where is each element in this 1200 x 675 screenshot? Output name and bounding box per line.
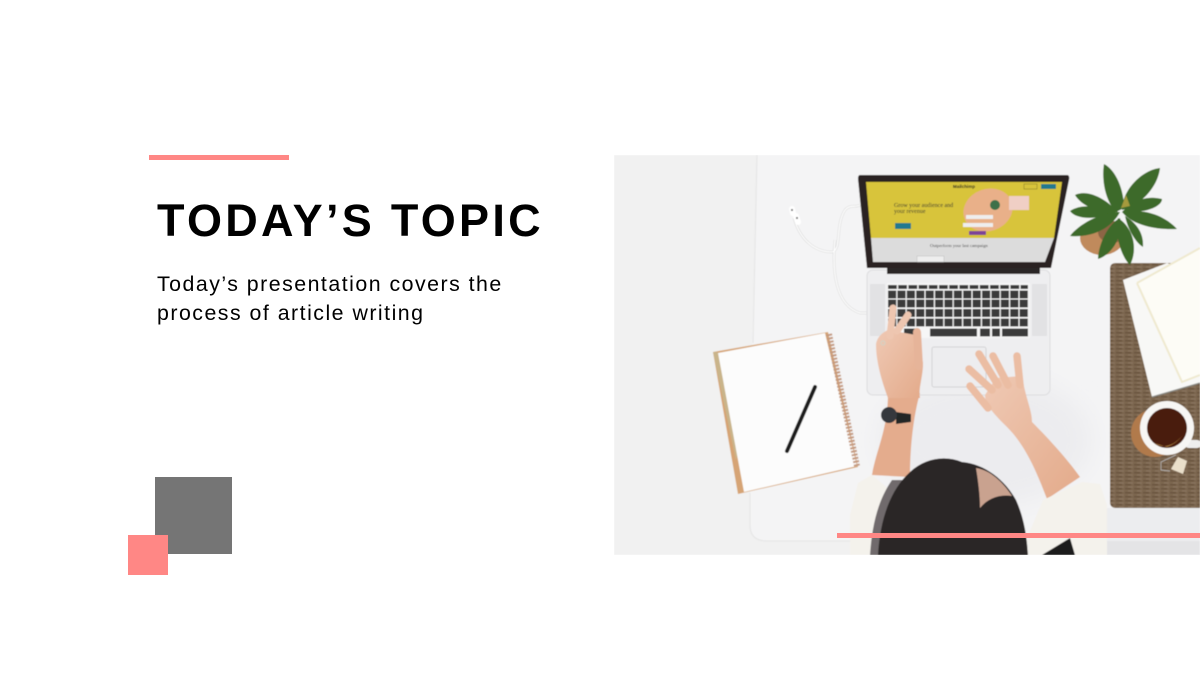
shirt bbox=[850, 475, 1107, 555]
pen bbox=[787, 387, 815, 451]
laptop bbox=[858, 175, 1069, 395]
screen content: Grow your audience and bbox=[894, 203, 953, 209]
photo: person typing on a laptop at a desk bbox=[614, 155, 1200, 555]
tablemat bbox=[1110, 263, 1200, 508]
accent bar: over photo bbox=[837, 533, 1200, 538]
screen content: your revenue bbox=[894, 209, 926, 215]
notebook bbox=[713, 332, 858, 494]
hinge bbox=[887, 268, 1040, 274]
laptop base bbox=[867, 270, 1050, 395]
title: TODAY’S TOPIC bbox=[157, 195, 544, 246]
teacup with saucer and tea bag bbox=[1131, 401, 1200, 474]
hair bbox=[870, 458, 1028, 555]
screen content: Mailchimp bbox=[953, 184, 975, 189]
subtitle text: Today’s presentation covers the bbox=[157, 272, 503, 296]
subtitle text: process of article writing bbox=[157, 300, 425, 324]
screen content: Outperform your last campaign bbox=[930, 243, 988, 248]
keyboard bbox=[887, 283, 1030, 338]
left arm and hand bbox=[872, 308, 923, 477]
watch bbox=[896, 412, 911, 424]
potted plant bbox=[1070, 164, 1177, 265]
lid and screen bbox=[858, 175, 1069, 268]
pink square bbox=[128, 535, 168, 575]
stack of books bbox=[1123, 248, 1200, 397]
ring bbox=[881, 341, 885, 345]
screen content bbox=[894, 182, 1056, 262]
subtitle text bbox=[157, 272, 503, 324]
accent bar: top left bbox=[149, 155, 289, 160]
earphones and cable bbox=[791, 205, 868, 313]
desk background bbox=[614, 155, 1200, 555]
right arm and hand bbox=[969, 354, 1080, 499]
decorative squares bbox=[128, 477, 232, 575]
trackpad bbox=[932, 347, 986, 387]
grey square bbox=[155, 477, 232, 554]
